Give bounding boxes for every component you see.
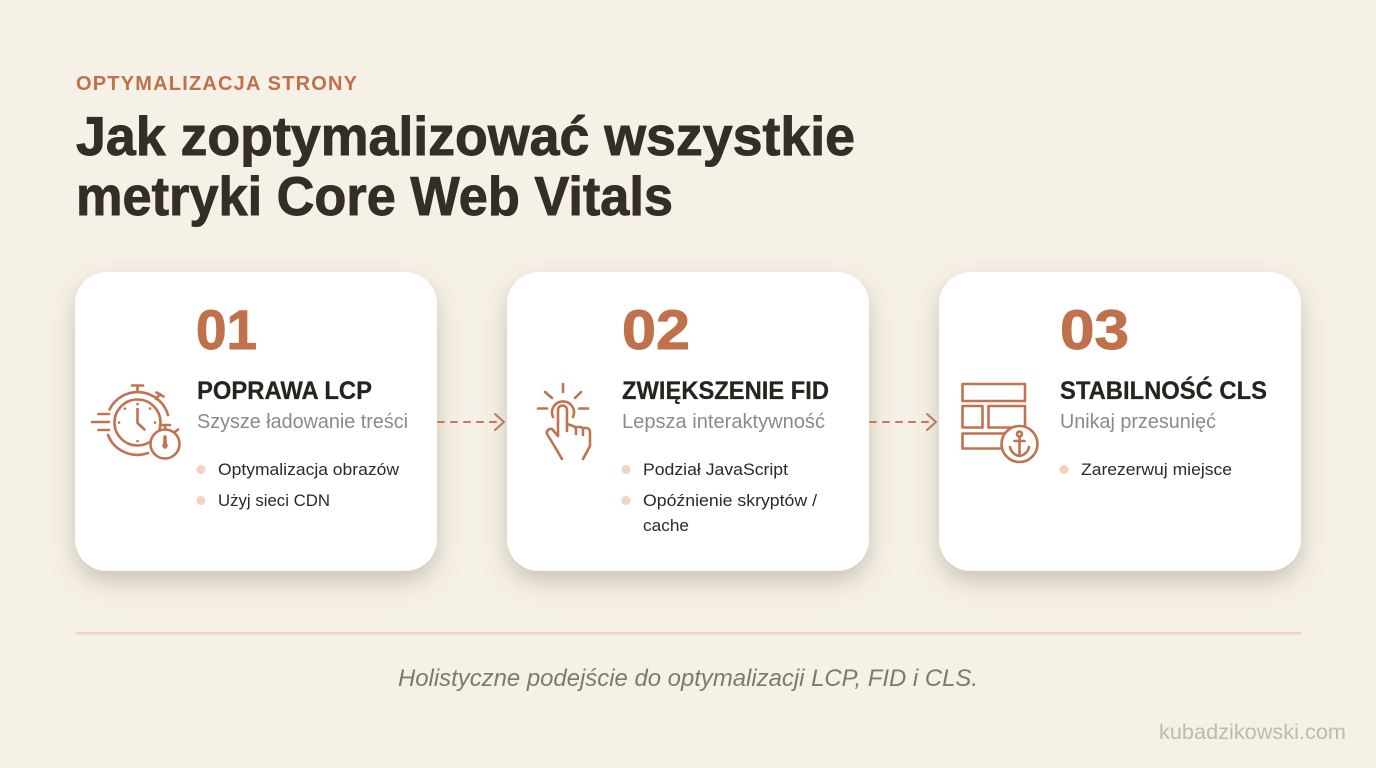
bullet list: Użyj sieci CDN: [218, 491, 330, 510]
bullet list: Podział JavaScript: [643, 460, 788, 479]
bullet list: cache: [643, 516, 689, 535]
arrow: 02 to 03: [870, 414, 936, 430]
subtitle: Unikaj przesunięć: [1060, 411, 1216, 433]
icon: stopwatch: [92, 386, 180, 458]
panel: card 03 CLS: [939, 272, 1301, 571]
eyebrow: OPTYMALIZACJA STRONY: [76, 73, 358, 95]
watermark: kubadzikowski.com: [1159, 721, 1346, 744]
bullet list: Zarezerwuj miejsce: [1081, 460, 1232, 479]
title: Jak zoptymalizować wszystkie: [76, 105, 855, 167]
number: 03: [1060, 298, 1129, 361]
subtitle: Szysze ładowanie treści: [197, 411, 408, 433]
bullet list: [622, 460, 817, 535]
bullet list: Opóźnienie skryptów /: [643, 491, 817, 510]
icon: layout with anchor: [962, 384, 1038, 462]
icon: tapping hand: [538, 384, 590, 459]
bullet list: [196, 460, 400, 510]
heading: ZWIĘKSZENIE FID: [622, 377, 829, 405]
title: metryki Core Web Vitals: [76, 165, 673, 227]
subtitle: Lepsza interaktywność: [622, 411, 825, 433]
arrow: 01 to 02: [438, 414, 504, 430]
heading: POPRAWA LCP: [197, 377, 372, 405]
panel: card 01 LCP: [75, 272, 437, 571]
bullet list: Optymalizacja obrazów: [218, 460, 400, 479]
heading: STABILNOŚĆ CLS: [1060, 375, 1267, 405]
panel: card 02 FID: [507, 272, 869, 571]
title: [76, 105, 855, 227]
number: 01: [196, 298, 257, 361]
footer summary: Holistyczne podejście do optymalizacji LCP, FID i CLS.: [398, 665, 978, 692]
number: 02: [622, 298, 690, 361]
